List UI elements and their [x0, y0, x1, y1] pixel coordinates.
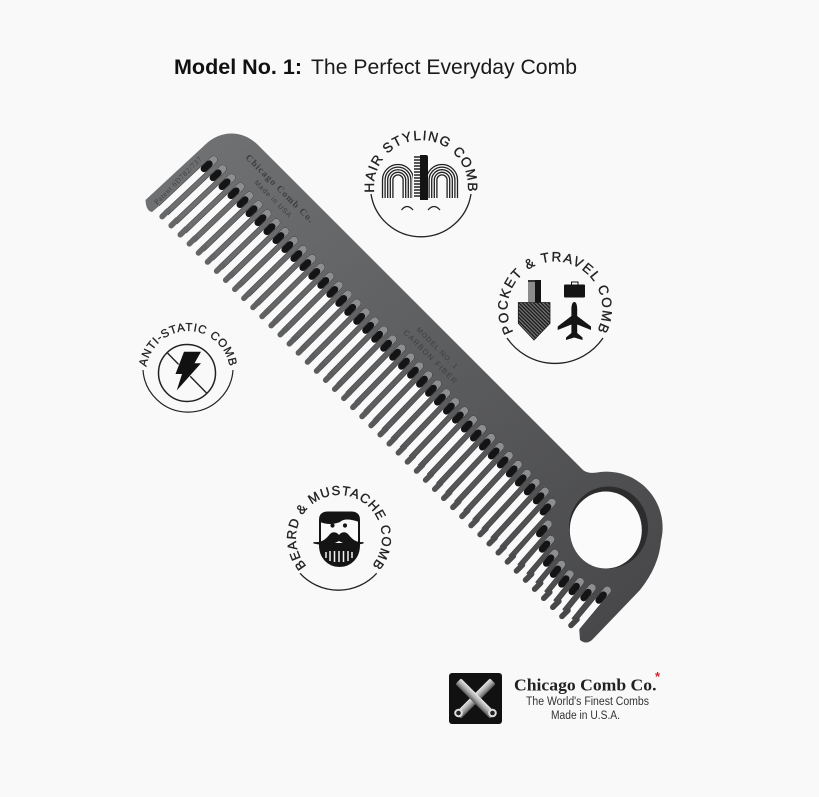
badge text: BEARD & MUSTACHE COMB: [286, 486, 392, 571]
icon: briefcase: [564, 282, 585, 298]
badge text: HAIR STYLING COMB: [364, 130, 478, 192]
engraved text: MODEL NO. 1: [415, 326, 458, 370]
badge: anti-static comb: [139, 322, 237, 413]
comb ring hole: [569, 486, 648, 568]
badge text: POCKET & TRAVEL COMB: [498, 252, 612, 335]
title: The Perfect Everyday Comb: [311, 55, 577, 79]
icon: comb in pocket: [518, 280, 550, 340]
title: Model No. 1:: [174, 55, 302, 79]
title: [174, 55, 577, 79]
logo text: Chicago Comb Co.: [514, 676, 656, 694]
logo text: [514, 669, 661, 722]
comb body: [146, 133, 663, 642]
icon: no static: [158, 344, 216, 402]
logo text: *: [655, 669, 661, 684]
engraved text: Patent 6D782/737: [152, 155, 204, 206]
badge text: ANTI-STATIC COMB: [139, 322, 237, 368]
logo mark: [449, 673, 502, 724]
icon: hair arcs: [382, 164, 458, 210]
logo text: The World's Finest Combs: [526, 696, 649, 708]
engraved text: CARBON FIBER: [402, 328, 459, 386]
engraved text: Made in USA: [253, 179, 292, 219]
badge: hair styling comb: [364, 130, 478, 238]
badge: beard and mustache comb: [286, 486, 392, 591]
icon: bearded face: [314, 512, 364, 566]
comb illustration: [146, 133, 663, 642]
logo: Chicago Comb Co.: [449, 669, 661, 724]
engraved text: Chicago Comb Co.: [243, 153, 315, 225]
engraved text: [152, 153, 459, 386]
icon: vertical comb: [413, 155, 428, 200]
logo text: Made in U.S.A.: [551, 710, 620, 722]
comb teeth: [149, 158, 630, 638]
icon: airplane: [558, 302, 591, 340]
badge: pocket and travel comb: [498, 252, 612, 364]
